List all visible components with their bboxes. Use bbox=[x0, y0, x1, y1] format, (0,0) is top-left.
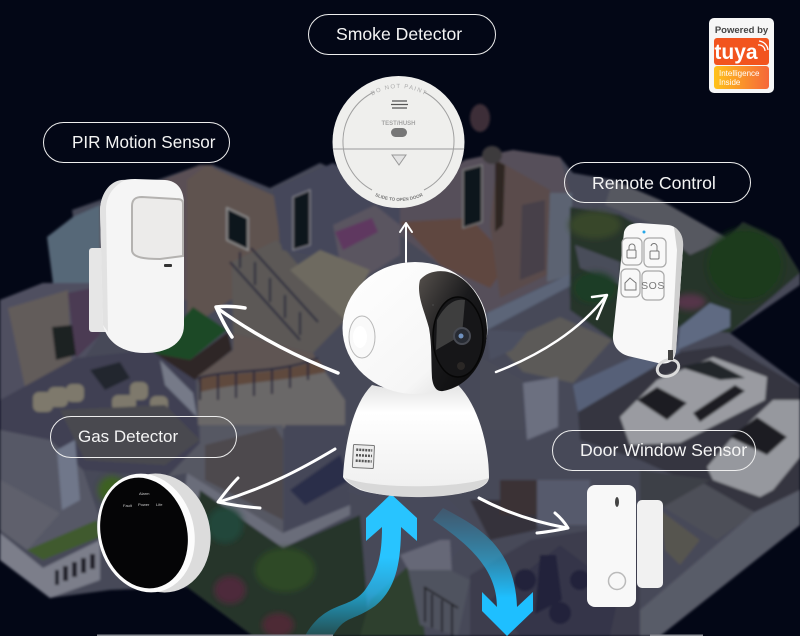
badge: Powered by Tuya: tuya bbox=[714, 41, 758, 64]
centre floor under camera bbox=[340, 490, 480, 580]
camera head bbox=[342, 262, 488, 394]
security camera bbox=[342, 262, 489, 497]
label: Remote Control: Remote Control bbox=[592, 173, 716, 193]
plant by smoke detector bbox=[470, 104, 490, 132]
gas detector: Life bbox=[156, 502, 163, 507]
lounge bbox=[0, 350, 200, 477]
label: Smoke Detector: Smoke Detector bbox=[336, 24, 462, 44]
icon: arrow to gas detector bbox=[218, 449, 335, 508]
badge: Powered by Tuya: Intelligence bbox=[719, 69, 760, 78]
gardens right bbox=[570, 207, 800, 345]
left upper rooms bbox=[47, 205, 100, 283]
driveway and cars bbox=[578, 345, 800, 512]
badge: Powered by Tuya: Inside bbox=[719, 78, 741, 87]
camera grille bbox=[352, 444, 375, 469]
next-panel edge slivers bbox=[97, 634, 703, 636]
remote control bbox=[613, 223, 683, 379]
centre lower rooms bbox=[167, 425, 283, 533]
icon: cyan upward arrow bbox=[305, 494, 417, 636]
lower-left terrace bbox=[0, 430, 100, 560]
upper middle room bbox=[273, 163, 400, 260]
label: PIR Motion Sensor bbox=[43, 122, 230, 163]
badge: Powered by Tuya bbox=[709, 18, 774, 93]
gas detector: Fault bbox=[123, 503, 133, 508]
camera visor bbox=[419, 271, 487, 391]
courtyard right bbox=[498, 317, 612, 383]
label: PIR Motion Sensor: PIR Motion Sensor bbox=[72, 133, 215, 152]
right of smoke detector bbox=[400, 150, 570, 313]
gas detector: Power bbox=[138, 502, 150, 507]
icon: arrow to door window sensor bbox=[479, 498, 568, 533]
gas detector bbox=[85, 463, 223, 603]
camera lens ring bbox=[433, 297, 483, 377]
camera pivot bbox=[349, 316, 375, 358]
PIR motion sensor bbox=[89, 179, 184, 353]
windows bbox=[227, 208, 248, 250]
stair rails bbox=[198, 248, 318, 400]
house mass bbox=[0, 150, 800, 636]
icon: cyan downward arrow bbox=[433, 508, 533, 636]
door window sensor bbox=[587, 485, 663, 607]
icon: arrow to PIR sensor bbox=[216, 306, 338, 373]
label: Smoke Detector bbox=[308, 14, 496, 55]
front garden bbox=[187, 490, 370, 636]
right block rooms and wall bbox=[663, 483, 755, 540]
icon: arrow to remote control bbox=[496, 295, 607, 372]
smoke detector: TEST/HUSH bbox=[381, 121, 416, 127]
billiard table bbox=[152, 307, 227, 360]
label: Gas Detector bbox=[50, 416, 237, 458]
smoke detector: DO NOT PAINT bbox=[370, 84, 427, 96]
gas detector: Alarm bbox=[139, 491, 150, 496]
camera base bbox=[343, 385, 489, 497]
label: Door Window Sensor: Door Window Sensor bbox=[580, 440, 747, 460]
patio bbox=[470, 530, 640, 636]
label: Remote Control bbox=[564, 162, 751, 203]
smoke detector: SLIDE TO OPEN DOOR bbox=[375, 193, 423, 202]
smoke detector bbox=[332, 76, 464, 208]
badge: Powered by Tuya: Powered by bbox=[715, 25, 769, 36]
stairs floor bbox=[232, 240, 345, 353]
label: Door Window Sensor bbox=[552, 430, 756, 471]
remote control: SOS bbox=[641, 280, 665, 292]
label: Gas Detector: Gas Detector bbox=[78, 427, 178, 446]
icon: arrow to smoke detector bbox=[400, 223, 412, 262]
